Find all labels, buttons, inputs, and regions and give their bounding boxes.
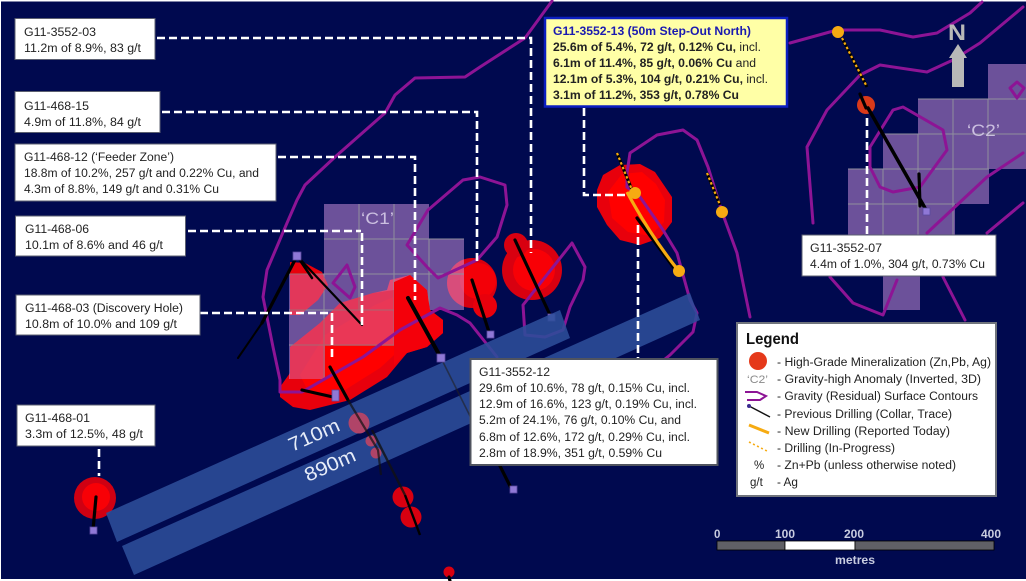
710m distance band: [106, 310, 570, 542]
legend row: new drilling: - New Drilling (Reported Today): [777, 426, 950, 438]
callout: G11-3552-12: 2.8m of 18.9%, 351 g/t, 0.59% Cu: [479, 448, 662, 460]
callout: G11-3552-13 50m step-out north: [545, 18, 787, 106]
scale bar: 0: [714, 529, 720, 541]
legend row: gravity surface contours: - Gravity (Residual) Surface Contours: [777, 391, 978, 403]
legend row: gravity-high anomaly: - Gravity-high Anomaly (Inverted, 3D): [777, 374, 981, 386]
band label 890m: 890m: [301, 445, 359, 487]
callout: G11-3552-12: 6.8m of 12.6%, 172 g/t, 0.29% Cu, incl.: [479, 432, 690, 444]
label C1: ‘C1’: [361, 209, 394, 228]
scale bar: metres: [835, 555, 875, 567]
icon: north arrow: N: [948, 20, 966, 45]
scale bar: 100: [775, 529, 795, 541]
callout: G11-3552-12: G11-3552-12: [479, 367, 550, 379]
drill traces and pale mineralization seen through the bands: [348, 354, 472, 535]
callout: G11-3552-03: 11.2m of 8.9%, 83 g/t: [24, 43, 142, 55]
dashed leader lines: [99, 38, 867, 476]
callout: G11-468-15: [15, 92, 160, 132]
legend row: percent: - Zn+Pb (unless otherwise noted): [777, 460, 956, 472]
scale bar: 400: [981, 529, 1001, 541]
callout: G11-3552-12: 5.2m of 24.1%, 76 g/t, 0.10% Cu, and: [479, 415, 681, 427]
band label 710m: 710m: [285, 415, 343, 457]
callout: G11-468-15: G11-468-15: [24, 101, 89, 113]
label C2: ‘C2’: [967, 121, 1000, 140]
callout: G11-468-12 feeder zone: G11-468-12 (‘Feeder Zone’): [24, 152, 174, 164]
red mineralization zones: [74, 96, 875, 578]
saturated red over the C1 grid: [290, 262, 443, 379]
gravity-high anomaly C2 grid: [848, 64, 1026, 310]
gravity surface contours: [263, 1, 1024, 392]
callout: G11-3552-13 50m step-out north: 25.6m of 5.4%, 72 g/t, 0.12% Cu, incl.: [553, 42, 761, 54]
callout: G11-468-01: 3.3m of 12.5%, 48 g/t: [25, 429, 144, 441]
callout: G11-468-01: G11-468-01: [25, 413, 90, 425]
callout: G11-3552-13 50m step-out north: 12.1m of 5.3%, 104 g/t, 0.21% Cu, incl.: [553, 74, 768, 86]
legend row: percent: %: [754, 460, 764, 472]
callout: G11-468-06: 10.1m of 8.6% and 46 g/t: [25, 240, 164, 252]
legend row: high-grade mineralization: [749, 352, 991, 370]
legend row: high-grade mineralization: - High-Grade Mineralization (Zn,Pb, Ag): [777, 357, 991, 369]
890m distance band: [122, 293, 700, 575]
callout: G11-468-12 feeder zone: 18.8m of 10.2%, 257 g/t and 0.22% Cu, and: [24, 168, 259, 180]
callout: G11-3552-07: 4.4m of 1.0%, 304 g/t, 0.73% Cu: [810, 259, 985, 271]
callout: G11-3552-12: 12.9m of 16.6%, 123 g/t, 0.19% Cu, incl.: [479, 399, 697, 411]
scale bar: 200: [844, 529, 864, 541]
legend row: gravity-high anomaly: ‘C2’: [747, 374, 768, 386]
legend row: previous drilling: [747, 404, 952, 421]
legend row: previous drilling: - Previous Drilling (Collar, Trace): [777, 409, 952, 421]
callout: G11-468-01: [17, 405, 155, 446]
callout: G11-3552-03: [15, 18, 155, 60]
new drilling and in-progress drilling: [617, 26, 867, 277]
callout: G11-468-15: 4.9m of 11.8%, 84 g/t: [24, 117, 142, 129]
callout: G11-3552-03: G11-3552-03: [24, 27, 96, 39]
legend row: grams per tonne: [750, 477, 798, 489]
callout: G11-468-06: [16, 216, 186, 256]
panel: legend: [737, 323, 996, 496]
callout: G11-3552-13 50m step-out north: 3.1m of 11.2%, 353 g/t, 0.78% Cu: [553, 90, 739, 102]
callout: G11-468-06: G11-468-06: [25, 224, 89, 236]
callout: G11-3552-12: 29.6m of 10.6%, 78 g/t, 0.15% Cu, incl.: [479, 383, 690, 395]
callout: G11-3552-07: [802, 235, 996, 276]
callout: G11-3552-12: [470, 359, 718, 465]
icon: north arrow: [948, 20, 967, 87]
legend row: drilling in progress: - Drilling (In-Progress): [777, 443, 895, 455]
callout: G11-468-03 discovery hole: G11-468-03 (Discovery Hole): [25, 303, 183, 315]
callout: G11-468-03 discovery hole: [16, 295, 200, 335]
callout: G11-3552-07: G11-3552-07: [810, 243, 882, 255]
legend row: grams per tonne: - Ag: [777, 477, 798, 489]
previous drilling traces and collars: [90, 94, 930, 581]
callout: G11-3552-13 50m step-out north: 6.1m of 11.4%, 85 g/t, 0.06% Cu and: [553, 58, 756, 70]
gravity-high anomaly C1 grid: [289, 204, 464, 379]
legend heading: Legend: [746, 331, 799, 348]
scale bar: [714, 529, 1001, 567]
callout: G11-468-12 feeder zone: [15, 144, 276, 201]
callout: G11-3552-13 50m step-out north: G11-3552-13 (50m Step-Out North): [553, 26, 751, 38]
legend row: grams per tonne: g/t: [750, 477, 764, 489]
callout: G11-468-12 feeder zone: 4.3m of 8.8%, 149 g/t and 0.31% Cu: [24, 184, 219, 196]
callout: G11-468-03 discovery hole: 10.8m of 10.0% and 109 g/t: [25, 319, 178, 331]
